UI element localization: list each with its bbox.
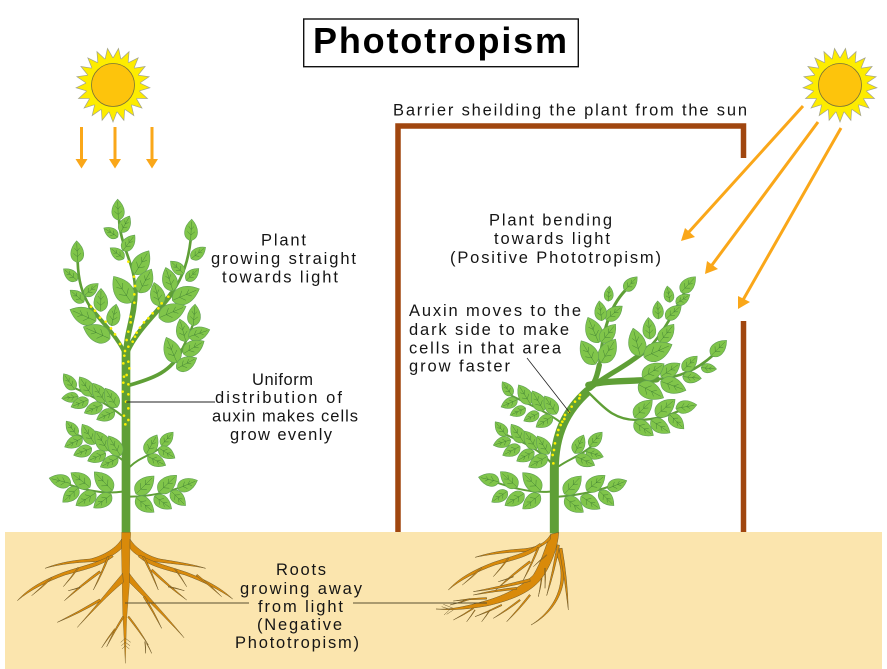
label: auxin moves xyxy=(409,302,581,376)
label: plant bending: towards light xyxy=(494,230,610,248)
barrier label: Barrier sheilding the plant from the sun xyxy=(393,102,747,120)
label: uniform distribution of auxin: distribution of xyxy=(215,389,342,407)
label: roots growing away: Phototropism) xyxy=(235,634,359,652)
label: uniform distribution of auxin: Uniform xyxy=(252,371,313,389)
label: roots growing away xyxy=(235,561,363,652)
right plant xyxy=(477,272,731,533)
left arrows: vertical sunlight xyxy=(76,127,158,168)
barrier xyxy=(398,126,744,532)
label: plant growing straight: Plant xyxy=(261,232,306,250)
label: plant growing straight: towards light xyxy=(222,268,338,286)
label: plant bending: (Positive Phototropism) xyxy=(450,249,661,267)
label: uniform distribution of auxin: grow evenly xyxy=(230,426,333,444)
auxin dots xyxy=(90,260,170,426)
label: auxin moves: Auxin moves to the xyxy=(409,302,581,320)
label: uniform distribution of auxin: auxin makes cells xyxy=(212,408,358,426)
soil xyxy=(5,532,882,669)
left plant xyxy=(48,199,212,533)
leader lines: roots xyxy=(125,602,487,604)
leader line: auxin xyxy=(527,358,570,413)
title: Phototropism xyxy=(313,20,567,61)
label: auxin moves: dark side to make xyxy=(409,321,569,339)
label: uniform distribution of auxin xyxy=(212,371,358,444)
right roots xyxy=(436,532,570,625)
label: roots growing away: from light xyxy=(258,598,343,616)
label: plant growing straight xyxy=(211,232,356,286)
leaves xyxy=(48,199,212,518)
leaves xyxy=(477,272,731,518)
stem and branches xyxy=(490,288,713,533)
label: plant growing straight: growing straight xyxy=(211,250,356,268)
label: plant bending xyxy=(450,212,661,267)
stem and branches xyxy=(60,218,193,533)
label: auxin moves: grow faster xyxy=(409,358,510,376)
label: auxin moves: cells in that area xyxy=(409,340,562,358)
label: plant bending: Plant bending xyxy=(489,212,612,230)
right arrows: angled sunlight xyxy=(681,106,841,309)
left roots xyxy=(17,532,233,663)
auxin dots xyxy=(551,394,581,465)
icon: left sun xyxy=(76,48,150,122)
icon: right sun xyxy=(803,48,877,122)
label: roots growing away: Roots xyxy=(276,561,326,579)
label: roots growing away: (Negative xyxy=(257,616,342,634)
leader line: uniform distribution xyxy=(126,401,215,403)
label: roots growing away: growing away xyxy=(240,580,363,598)
